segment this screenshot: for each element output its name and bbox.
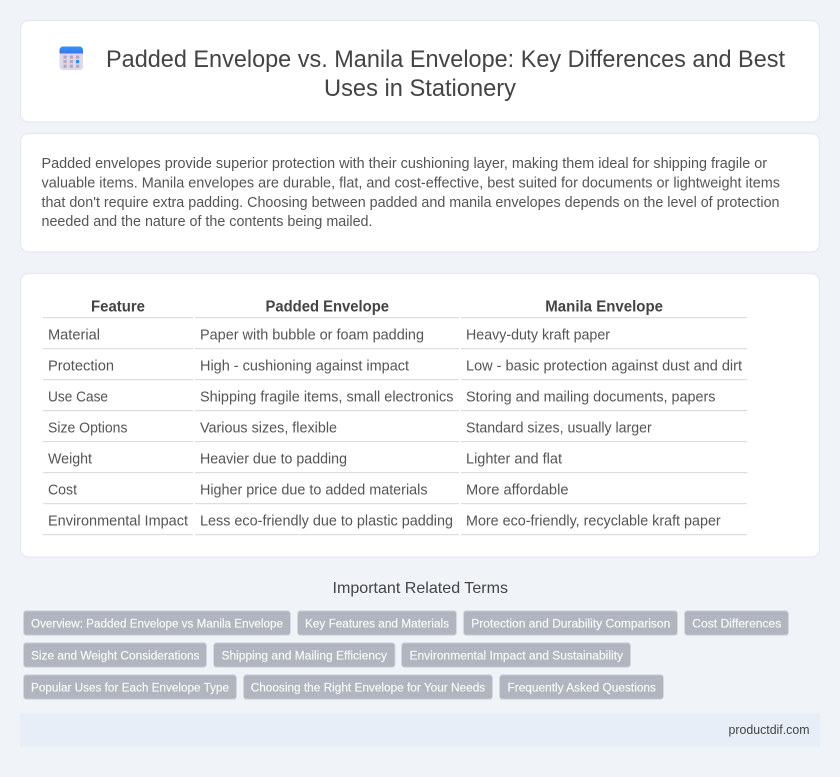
tag: overview xyxy=(24,611,290,635)
title: Padded Envelope vs. Manila Envelope: Key Differences and Best xyxy=(106,46,785,73)
table row: protection: High - cushioning against impact xyxy=(200,358,409,374)
table row: weight: Weight xyxy=(48,451,92,467)
table header row: Manila Envelope xyxy=(545,299,663,316)
tag: choosing xyxy=(244,675,492,699)
tag: key features: Key Features and Materials xyxy=(305,616,449,630)
tag: shipping xyxy=(214,643,395,667)
table row: protection xyxy=(48,358,742,374)
tag: key features xyxy=(298,611,456,635)
table row: size options xyxy=(48,420,652,436)
panel: summary text xyxy=(20,134,820,252)
title xyxy=(106,46,785,102)
tag: environmental xyxy=(402,643,630,667)
table row: cost: Higher price due to added materials xyxy=(200,482,428,498)
icon: calendar xyxy=(60,46,83,70)
table row: material: Material xyxy=(48,327,100,343)
tag: faq xyxy=(500,675,664,699)
footer: productdif.com xyxy=(728,723,810,737)
table row: size options: Various sizes, flexible xyxy=(200,420,337,436)
table row: weight: Heavier due to padding xyxy=(200,451,347,467)
panel: header xyxy=(20,20,820,122)
title: Uses in Stationery xyxy=(324,75,516,102)
table row: environmental impact: Less eco-friendly due to plastic padding xyxy=(200,513,453,529)
text block: summary paragraph: valuable items. Manila envelopes are durable, flat, and cost-effective, best suited for documents or lightweight items xyxy=(42,175,780,191)
table row: use case: Shipping fragile items, small electronics xyxy=(200,389,454,405)
table row: environmental impact: Environmental Impact xyxy=(48,513,188,529)
text block: summary paragraph: needed and the nature of the contents being mailed. xyxy=(42,214,372,230)
table header row xyxy=(91,299,663,316)
tag: shipping: Shipping and Mailing Efficiency xyxy=(222,648,388,662)
table row: size options: Size Options xyxy=(48,420,128,436)
table header row: Padded Envelope xyxy=(266,299,389,316)
tag: environmental: Environmental Impact and Sustainability xyxy=(410,648,624,662)
table row: weight: Lighter and flat xyxy=(466,451,562,467)
text block: summary paragraph: that don't require extra padding. Choosing between padded and manila envelopes depends on the level of protection xyxy=(42,195,780,211)
tag: popular uses xyxy=(24,675,236,699)
heading: related terms: Important Related Terms xyxy=(332,580,508,597)
panel: comparison table xyxy=(20,274,820,557)
table row: cost: Cost xyxy=(48,482,77,498)
table row: cost xyxy=(48,482,568,498)
table row: material xyxy=(48,327,610,343)
tag: size and weight: Size and Weight Considerations xyxy=(31,648,200,662)
tag: cost xyxy=(684,611,788,635)
table row: cost: More affordable xyxy=(466,482,568,498)
table row: material: Heavy-duty kraft paper xyxy=(466,327,610,343)
table row: weight xyxy=(48,451,562,467)
tag: choosing: Choosing the Right Envelope for Your Needs xyxy=(251,680,485,694)
panel: related term tags xyxy=(24,611,788,699)
tag: cost: Cost Differences xyxy=(692,616,781,630)
tag: overview: Overview: Padded Envelope vs Manila Envelope xyxy=(31,616,283,630)
tag: protection: Protection and Durability Comparison xyxy=(471,616,670,630)
table row: use case: Use Case xyxy=(48,389,108,405)
tag: popular uses: Popular Uses for Each Envelope Type xyxy=(31,680,229,694)
tag: faq: Frequently Asked Questions xyxy=(508,680,656,694)
table row: size options: Standard sizes, usually larger xyxy=(466,420,652,436)
text block: summary paragraph xyxy=(42,156,780,230)
tag: size and weight xyxy=(24,643,206,667)
table header row: Feature xyxy=(91,299,145,316)
table row: use case: Storing and mailing documents, papers xyxy=(466,389,716,405)
footer xyxy=(20,713,820,747)
text block: summary paragraph: Padded envelopes provide superior protection with their cushioning layer, making them ideal for shipping fragile or xyxy=(42,156,767,172)
table row: environmental impact xyxy=(48,513,721,529)
table row: environmental impact: More eco-friendly, recyclable kraft paper xyxy=(466,513,721,529)
table row: material: Paper with bubble or foam padding xyxy=(200,327,424,343)
table row: protection: Protection xyxy=(48,358,114,374)
table row: use case xyxy=(48,389,716,405)
table row: protection: Low - basic protection against dust and dirt xyxy=(466,358,742,374)
tag: protection xyxy=(464,611,678,635)
